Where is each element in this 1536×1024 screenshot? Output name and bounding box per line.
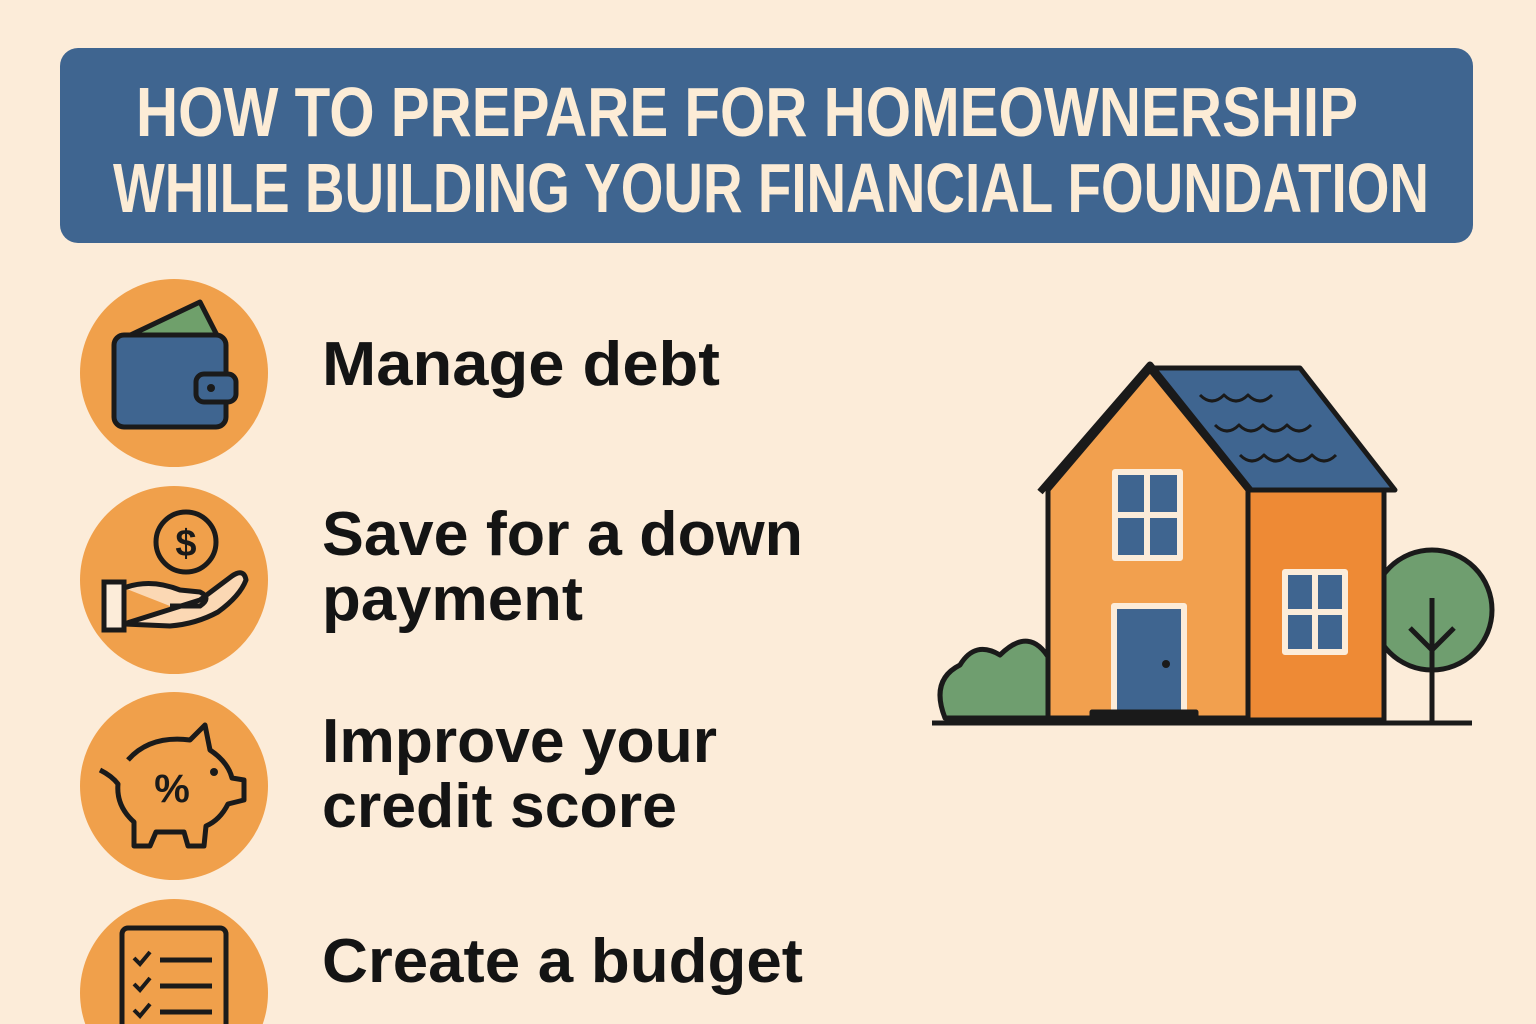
item: improve credit score: Improve your bbox=[322, 707, 717, 776]
tree bbox=[1372, 550, 1492, 722]
icon: hand with coin: $ bbox=[175, 523, 197, 565]
title banner bbox=[60, 48, 1473, 243]
item: improve credit score bbox=[80, 692, 717, 880]
bush bbox=[940, 641, 1050, 718]
item: improve credit score: credit score bbox=[322, 772, 677, 841]
icon: piggy bank bbox=[80, 692, 268, 880]
icon: piggy bank: % bbox=[154, 767, 190, 811]
item: create a budget: Create a budget bbox=[322, 927, 803, 996]
illustration: house bbox=[932, 365, 1492, 723]
item: manage debt: Manage debt bbox=[322, 330, 720, 399]
item: create a budget bbox=[80, 899, 803, 1024]
icon: wallet bbox=[80, 279, 268, 467]
icon: hand with coin bbox=[80, 486, 268, 674]
item: save for a down payment: Save for a down bbox=[322, 500, 803, 569]
item: save for a down payment: payment bbox=[322, 565, 583, 634]
icon: checklist bbox=[80, 899, 268, 1024]
item: manage debt bbox=[80, 279, 720, 467]
item: save for a down payment bbox=[80, 486, 803, 674]
